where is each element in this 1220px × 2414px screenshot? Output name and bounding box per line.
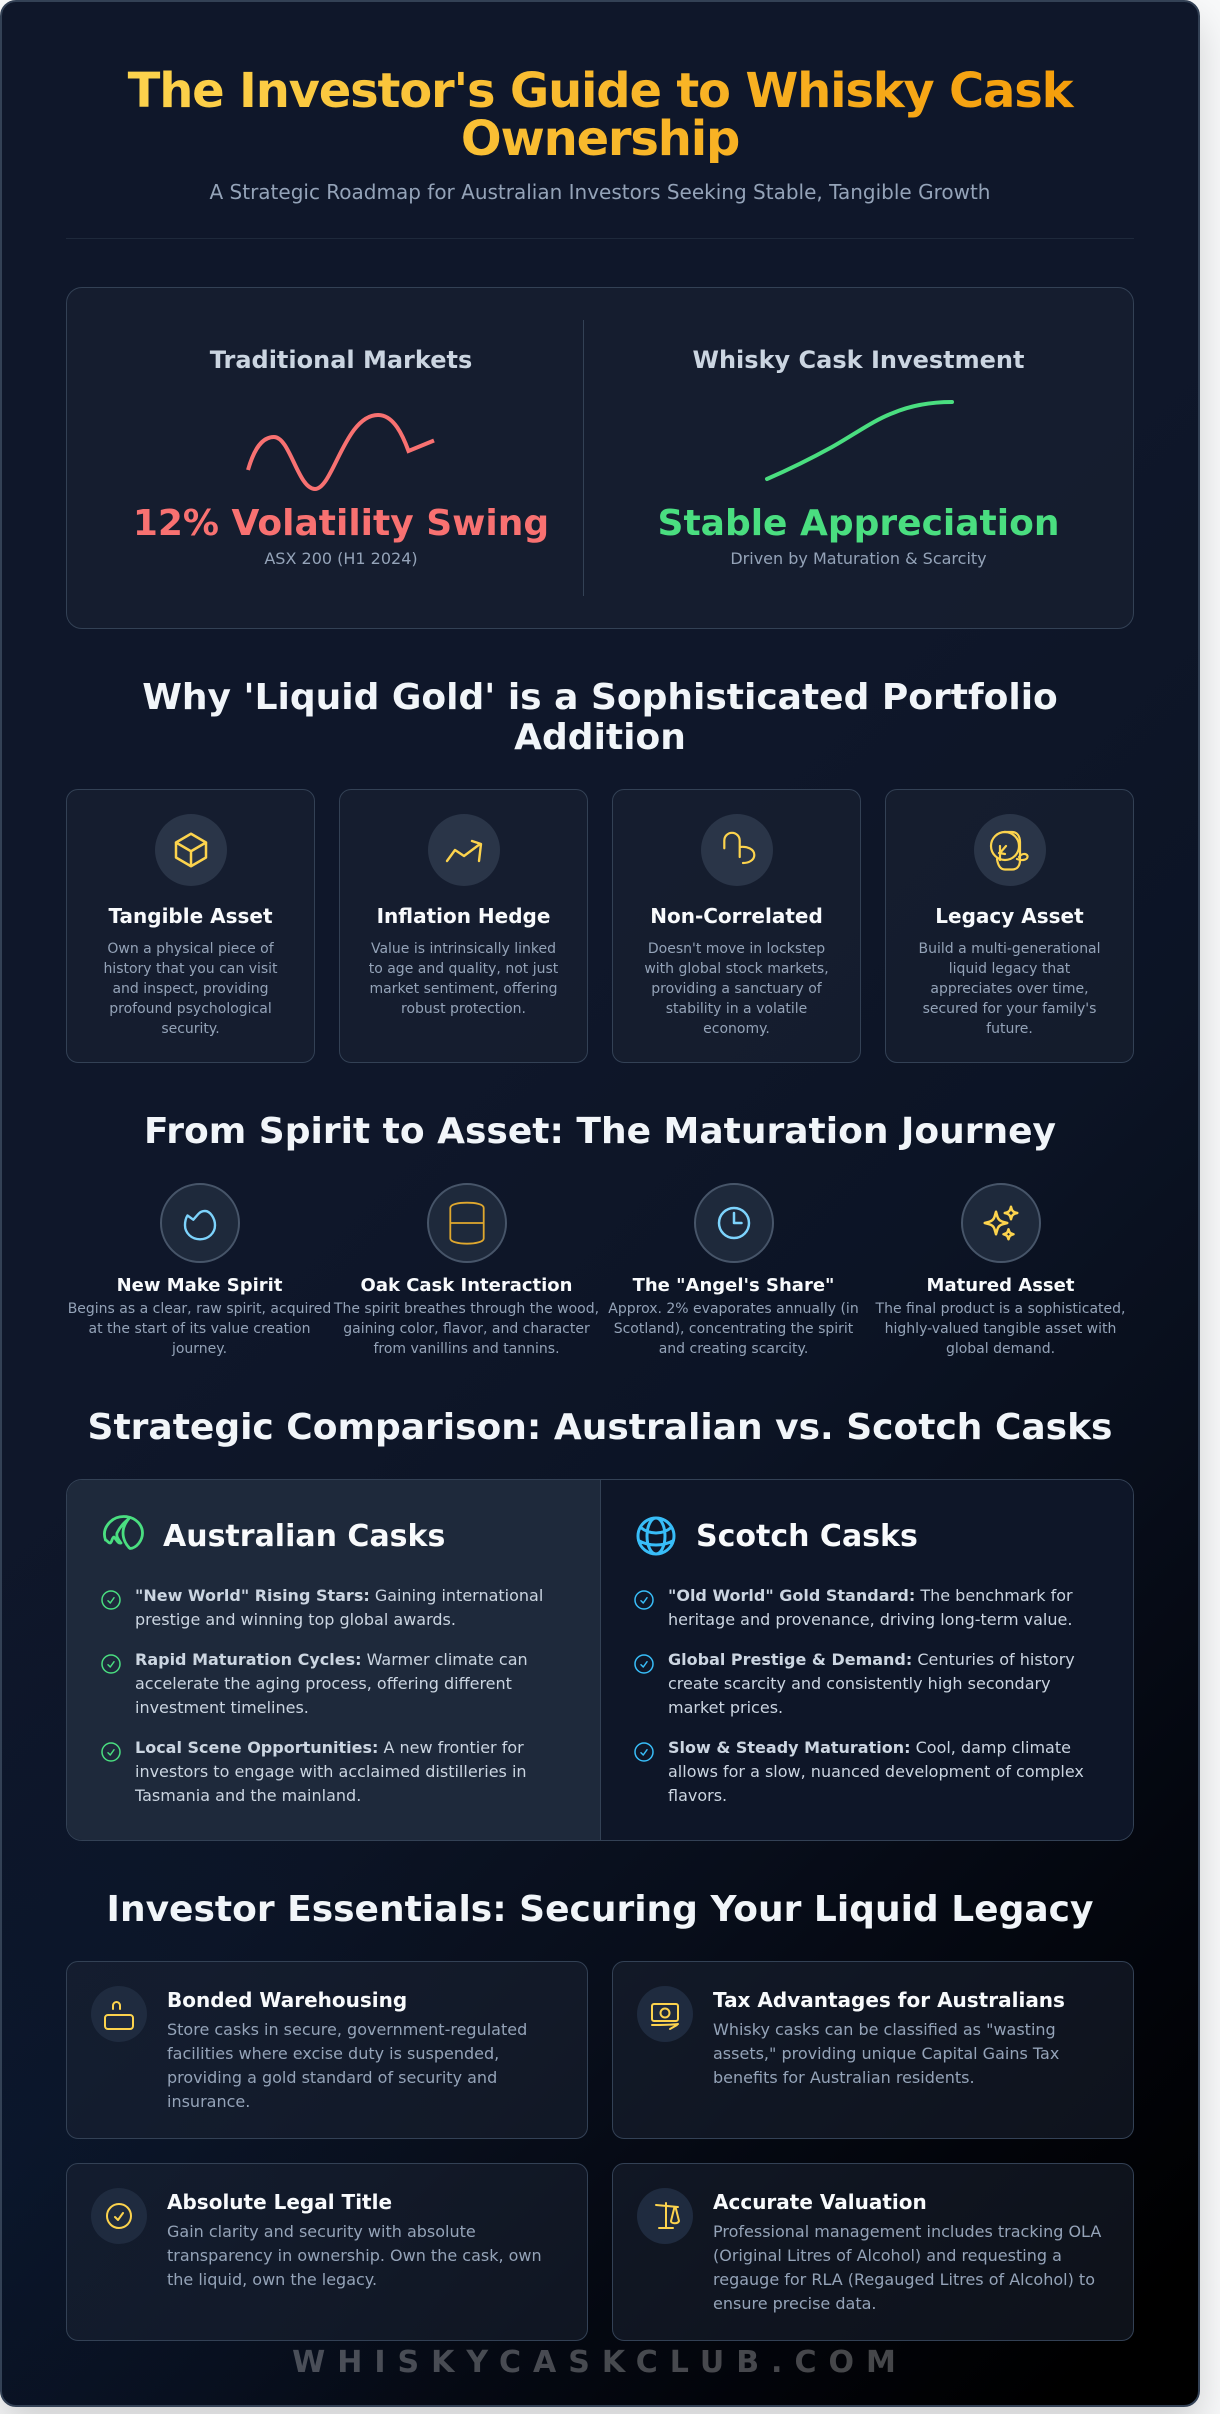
card text: assets," providing unique Capital Gains Tax [713, 2044, 1059, 2063]
card text: stability in a volatile [666, 1001, 807, 1017]
card title: Absolute Legal Title [167, 2190, 392, 2214]
heading: whisky cask investment: Whisky Cask Investment [692, 346, 1024, 374]
step text: The final product is a sophisticated, [876, 1301, 1125, 1317]
item text: Tasmania and the mainland. [135, 1786, 361, 1805]
stat: volatility swing: 12% Volatility Swing [133, 503, 549, 544]
item text: investment timelines. [135, 1698, 309, 1717]
list item [634, 1650, 1075, 1717]
item text: Local Scene Opportunities: A new frontier for [135, 1738, 524, 1757]
icon: sparkles [960, 1183, 1040, 1263]
card title: Tax Advantages for Australians [713, 1988, 1065, 2012]
item text [135, 1650, 528, 1717]
card: absolute legal title [66, 2163, 588, 2341]
card text: secured for your family's [923, 1001, 1096, 1017]
panel: australian casks [67, 1480, 600, 1856]
item text: investors to engage with acclaimed distilleries in [135, 1762, 527, 1781]
card: inflation hedge [339, 789, 588, 1063]
list item [101, 1586, 543, 1629]
card text: insurance. [167, 2092, 250, 2111]
card title: Tangible Asset [108, 904, 273, 928]
card body [167, 2188, 542, 2316]
item text: allows for a slow, nuanced development of complex [668, 1762, 1084, 1781]
icon: globe [636, 1516, 676, 1556]
card text [167, 2018, 527, 2114]
heading: liquid gold: Addition [514, 717, 686, 758]
step title: Matured Asset [927, 1275, 1074, 1296]
icon: australia map [103, 1515, 144, 1550]
icon: check [101, 1654, 121, 1674]
icon: check [634, 1590, 654, 1610]
step text: from vanillins and tannins. [373, 1341, 560, 1357]
icon: lock [91, 1986, 147, 2042]
card text [167, 2220, 542, 2292]
card text [369, 941, 558, 1017]
card: legacy asset [885, 789, 1134, 1063]
card text: transparency in ownership. Own the cask, own [167, 2246, 542, 2265]
card text: history that you can visit [103, 961, 278, 977]
panel: scotch casks [600, 1480, 1133, 1856]
card text: Whisky casks can be classified as "wasting [713, 2020, 1056, 2039]
title: Ownership [461, 111, 739, 167]
stat: stable appreciation: Stable Appreciation [658, 503, 1059, 544]
card text: economy. [703, 1021, 770, 1037]
chart: volatile line [246, 413, 435, 491]
item text: Slow & Steady Maturation: Cool, damp climate [668, 1738, 1071, 1757]
card text [713, 2018, 1065, 2090]
list item [634, 1738, 1084, 1805]
card: tax advantages [612, 1961, 1134, 2139]
heading: traditional markets: Traditional Markets [210, 346, 472, 374]
item text: heritage and provenance, driving long-term value. [668, 1610, 1072, 1629]
icon: barrel [426, 1183, 506, 1263]
card text [644, 941, 829, 1037]
heading: strategic comparison: Strategic Comparison: Australian vs. Scotch Casks [88, 1407, 1112, 1448]
card body [713, 2188, 1101, 2316]
heading: liquid gold [142, 677, 1058, 758]
item text: create scarcity and consistently high secondary [668, 1674, 1051, 1693]
step: angel's share [608, 1183, 859, 1357]
item text: market prices. [668, 1698, 783, 1717]
item text: "New World" Rising Stars: Gaining international [135, 1586, 543, 1605]
card text: market sentiment, offering [369, 981, 558, 997]
icon: banknote [637, 1986, 693, 2042]
card text: profound psychological [109, 1001, 272, 1017]
panel: market comparison [66, 287, 1134, 629]
heading: investor essentials: Investor Essentials: Securing Your Liquid Legacy [107, 1889, 1093, 1930]
step text [68, 1301, 331, 1357]
card text: Professional management includes tracking OLA [713, 2222, 1101, 2241]
panel: australian vs scotch [66, 1479, 1134, 1841]
card: non-correlated [612, 789, 861, 1063]
card text: regauge for RLA (Regauged Litres of Alcohol) to [713, 2270, 1095, 2289]
card text: future. [986, 1021, 1033, 1037]
column: whisky cask investment [658, 346, 1059, 568]
caption: maturation and scarcity: Driven by Maturation & Scarcity [730, 549, 987, 568]
step text: gaining color, flavor, and character [343, 1321, 590, 1337]
step: matured asset [875, 1183, 1125, 1357]
icon: check [101, 1590, 121, 1610]
step text [875, 1301, 1125, 1357]
step text: highly-valued tangible asset with [885, 1321, 1116, 1337]
card body [167, 1986, 527, 2114]
card title: Legacy Asset [935, 904, 1084, 928]
icon: clock [694, 1183, 774, 1263]
icon: check [634, 1654, 654, 1674]
card text: robust protection. [401, 1001, 526, 1017]
card text: ensure precise data. [713, 2294, 876, 2313]
heading: liquid gold: Why 'Liquid Gold' is a Sophisticated Portfolio [142, 677, 1058, 718]
pane heading: scotch casks [636, 1516, 918, 1556]
card body [713, 1986, 1065, 2114]
chart: stable rising line [764, 400, 954, 482]
panel: journey steps [68, 1183, 1125, 1357]
card text [918, 941, 1101, 1037]
item text [668, 1650, 1075, 1717]
heading: maturation journey: From Spirit to Asset: The Maturation Journey [144, 1111, 1056, 1152]
step text: Begins as a clear, raw spirit, acquired [68, 1301, 331, 1317]
card text: and inspect, providing [112, 981, 269, 997]
item text: flavors. [668, 1786, 727, 1805]
step text [608, 1301, 859, 1357]
step text [334, 1301, 599, 1357]
icon: legacy emblem [974, 814, 1046, 886]
card text: liquid legacy that [949, 961, 1070, 977]
card text: benefits for Australian residents. [713, 2068, 975, 2087]
step text: journey. [172, 1341, 227, 1357]
list item [101, 1650, 528, 1717]
item text: prestige and winning top global awards. [135, 1610, 456, 1629]
card text: Gain clarity and security with absolute [167, 2222, 476, 2241]
icon: scales [637, 2188, 693, 2244]
step text: and creating scarcity. [659, 1341, 808, 1357]
card text: the liquid, own the legacy. [167, 2270, 377, 2289]
card text [713, 2220, 1101, 2316]
panel: benefits cards [66, 789, 1134, 1063]
icon: check [101, 1742, 121, 1762]
card text: Build a multi-generational [918, 941, 1101, 957]
card text: security. [161, 1021, 220, 1037]
card text: appreciates over time, [930, 981, 1089, 997]
step text: at the start of its value creation [89, 1321, 310, 1337]
item text: Global Prestige & Demand: Centuries of history [668, 1650, 1075, 1669]
icon: split curve [700, 814, 772, 886]
icon: cube [154, 814, 226, 886]
card: bonded warehousing [66, 1961, 588, 2139]
step: oak cask interaction [334, 1183, 599, 1357]
title: The Investor's Guide to Whisky Cask [128, 63, 1072, 119]
pane heading: australian casks [103, 1515, 445, 1554]
step text: Scotland), concentrating the spirit [614, 1321, 853, 1337]
pane title: Australian Casks [163, 1519, 445, 1554]
card text [103, 941, 278, 1037]
card title: Inflation Hedge [377, 904, 550, 928]
card title: Bonded Warehousing [167, 1988, 407, 2012]
step title: Oak Cask Interaction [361, 1275, 572, 1296]
item text: Rapid Maturation Cycles: Warmer climate can [135, 1650, 528, 1669]
step text: Approx. 2% evaporates annually (in [608, 1301, 859, 1317]
card text: (Original Litres of Alcohol) and requesting a [713, 2246, 1062, 2265]
item text [135, 1586, 543, 1629]
pane title: Scotch Casks [696, 1519, 918, 1554]
item text [668, 1738, 1084, 1805]
step title: The "Angel's Share" [633, 1275, 834, 1296]
list item [101, 1738, 527, 1805]
card text: Store casks in secure, government-regulated [167, 2020, 527, 2039]
item text [134, 1738, 527, 1805]
panel: essentials cards [66, 1961, 1134, 2341]
card text: Value is intrinsically linked [371, 941, 556, 957]
subtitle: A Strategic Roadmap for Australian Investors Seeking Stable, Tangible Growth [210, 180, 990, 204]
card text: Doesn't move in lockstep [648, 941, 825, 957]
item text: accelerate the aging process, offering different [135, 1674, 512, 1693]
icon: droplet [160, 1183, 240, 1263]
title [66, 67, 1134, 163]
card: tangible asset [66, 789, 315, 1063]
item text: "Old World" Gold Standard: The benchmark for [668, 1586, 1073, 1605]
footer watermark: WHISKYCASKCLUB.COM [292, 2345, 908, 2380]
icon: check [634, 1742, 654, 1762]
card title: Non-Correlated [650, 904, 823, 928]
step: new make spirit [68, 1183, 331, 1357]
icon: rising arrow [428, 814, 500, 886]
card text: Own a physical piece of [107, 941, 274, 957]
card text: to age and quality, not just [369, 961, 558, 977]
card text: providing a sanctuary of [651, 981, 822, 997]
column: traditional markets [99, 320, 584, 596]
step title: New Make Spirit [117, 1275, 282, 1296]
step text: The spirit breathes through the wood, [334, 1301, 599, 1317]
card text: facilities where excise duty is suspended, [167, 2044, 499, 2063]
icon: check circle [91, 2188, 147, 2244]
step text: global demand. [946, 1341, 1055, 1357]
card title: Accurate Valuation [713, 2190, 927, 2214]
header: title and subtitle [66, 66, 1134, 239]
card: accurate valuation [612, 2163, 1134, 2341]
item text [668, 1586, 1073, 1629]
card text: providing a gold standard of security and [167, 2068, 497, 2087]
caption: ASX 200: ASX 200 (H1 2024) [264, 549, 418, 568]
list item [634, 1586, 1073, 1629]
card text: with global stock markets, [644, 961, 829, 977]
